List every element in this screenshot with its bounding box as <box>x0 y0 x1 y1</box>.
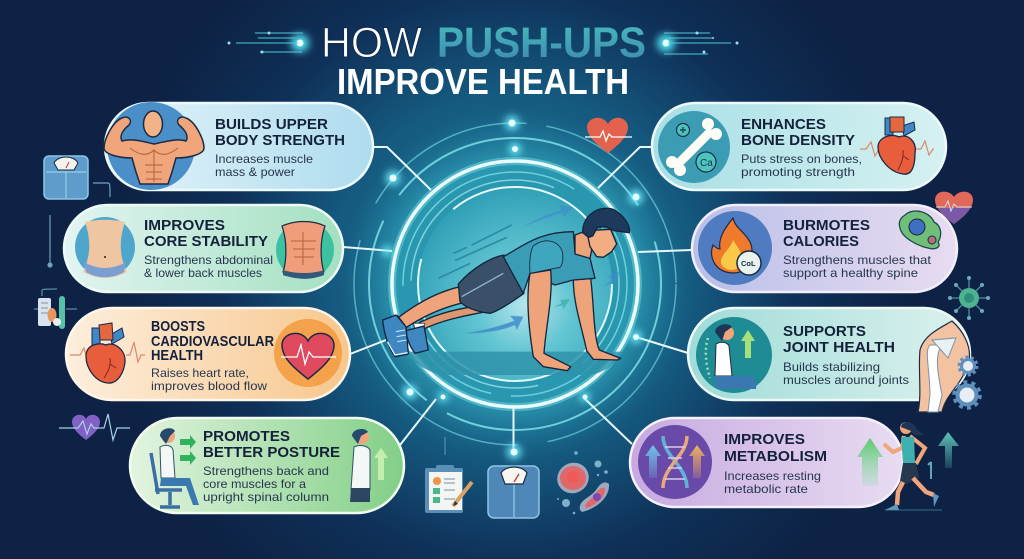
title: HOW <box>321 19 422 67</box>
text: burmotes calories: support a healthy spine <box>783 266 918 280</box>
far leg <box>415 307 486 329</box>
text: builds upper body strength: BUILDS UPPER <box>215 116 328 133</box>
text: burmotes calories: Strengthens muscles that <box>783 253 932 267</box>
floor band <box>405 352 623 375</box>
title streak right <box>657 32 738 54</box>
icon: heart with pulse in orange circle <box>274 319 342 387</box>
text: builds upper body strength <box>215 116 345 179</box>
icon: flexing muscular torso <box>104 102 204 190</box>
text: builds upper body strength: Increases muscle <box>215 152 313 166</box>
torso <box>503 232 595 293</box>
text: improves core stability <box>144 217 273 280</box>
icon: shoulder joint with gears <box>918 321 980 412</box>
title <box>321 19 646 102</box>
text: promotes better posture: BETTER POSTURE <box>203 444 340 461</box>
left decoration lines <box>48 183 110 267</box>
sleeve <box>530 241 563 273</box>
text: boosts cardiovascular health: HEALTH <box>151 347 203 364</box>
text: improves core stability: & lower back muscles <box>144 266 262 280</box>
icon: anatomical heart <box>70 323 145 383</box>
text: boosts cardiovascular health: BOOSTS <box>151 318 205 335</box>
panel: promotes better posture <box>130 418 404 513</box>
text: improves metabolism: Increases resting <box>724 469 821 483</box>
far arm <box>573 278 621 360</box>
panel: boosts cardiovascular health <box>66 308 350 400</box>
text: promotes better posture: upright spinal column <box>203 490 329 504</box>
icon: abdominal muscles <box>276 221 334 279</box>
text: promotes better posture: PROMOTES <box>203 428 290 445</box>
panel: burmotes calories <box>692 205 957 292</box>
icon: teal up arrows <box>928 432 959 479</box>
panel: builds upper body strength <box>104 102 373 190</box>
near shoe <box>383 315 408 357</box>
glowing nodes <box>382 116 643 459</box>
icon: weighing scale, bottom <box>488 466 539 518</box>
text: burmotes calories <box>783 217 932 280</box>
text: boosts cardiovascular health: improves blood flow <box>151 379 267 393</box>
text: supports joint health: muscles around joints <box>783 373 909 387</box>
near leg <box>397 287 463 328</box>
text: supports joint health: Builds stabilizing <box>783 360 880 374</box>
icon: heart with pulse, top <box>585 118 632 153</box>
neck <box>575 230 592 258</box>
icon: cells, bottom <box>552 451 609 514</box>
icon: flame with badge: CoL <box>741 259 756 268</box>
text: improves metabolism: metabolic rate <box>724 482 808 496</box>
title: IMPROVE HEALTH <box>337 61 629 102</box>
icon: green up arrow <box>857 438 883 486</box>
title: PUSH-UPS <box>437 19 646 67</box>
text: supports joint health: SUPPORTS <box>783 323 866 340</box>
shorts <box>458 255 524 313</box>
icon: DNA with arrows <box>638 425 712 499</box>
text: supports joint health: JOINT HEALTH <box>783 339 895 356</box>
icon: running woman <box>884 422 942 510</box>
icon: anatomical heart <box>860 117 934 174</box>
panel: improves core stability <box>64 205 343 292</box>
text: promotes better posture <box>203 428 340 504</box>
icon: flame with badge <box>698 211 772 285</box>
icon: clipboard, bottom <box>425 437 472 513</box>
text: improves core stability: Strengthens abdominal <box>144 253 273 267</box>
text: promotes better posture: core muscles for a <box>203 477 306 491</box>
icon: clipboard and vial, left <box>34 289 77 329</box>
text: promotes better posture: Strengthens back and <box>203 464 329 478</box>
icon: standing man with arrow <box>350 429 388 502</box>
panel: improves metabolism <box>630 418 903 507</box>
push-up figure <box>383 205 629 375</box>
text: boosts cardiovascular health: Raises heart rate, <box>151 366 249 380</box>
text: burmotes calories: BURMOTES <box>783 217 870 234</box>
text: improves core stability: CORE STABILITY <box>144 233 268 250</box>
icon: bone with calcium: Ca <box>700 158 713 169</box>
icon: purple heart with pulse <box>59 414 130 440</box>
panel: enhances bone density <box>652 103 946 190</box>
hair <box>583 208 629 237</box>
title streak left <box>228 32 309 54</box>
central ring graphic <box>340 109 690 459</box>
panel: supports joint health <box>688 308 980 412</box>
icon: waist <box>75 217 135 278</box>
text: enhances bone density: BONE DENSITY <box>741 132 855 149</box>
text: enhances bone density: promoting strength <box>741 165 855 179</box>
text: enhances bone density: ENHANCES <box>741 116 826 133</box>
text: enhances bone density <box>741 116 862 179</box>
far shoe <box>406 326 428 353</box>
icon: bone with calcium <box>658 111 730 183</box>
text: boosts cardiovascular health: CARDIOVASCULAR <box>151 333 274 350</box>
text: builds upper body strength: BODY STRENGTH <box>215 132 345 149</box>
icon: green cell <box>899 211 941 249</box>
text: builds upper body strength: mass & power <box>215 165 295 179</box>
text: improves metabolism: METABOLISM <box>724 448 827 465</box>
motion streaks <box>438 225 512 278</box>
text: supports joint health <box>783 323 909 387</box>
icon: virus <box>948 276 990 320</box>
text: improves core stability: IMPROVES <box>144 217 225 234</box>
icon: floating heart, right <box>935 192 973 224</box>
text: burmotes calories: CALORIES <box>783 233 859 250</box>
icon: seated man with arrows <box>151 428 199 507</box>
text: enhances bone density: Puts stress on bones, <box>741 152 862 166</box>
icon: weighing scale, left <box>44 156 88 199</box>
text: improves metabolism: IMPROVES <box>724 431 805 448</box>
text: boosts cardiovascular health <box>151 318 274 393</box>
text: improves metabolism <box>724 431 827 496</box>
near arm <box>528 270 571 371</box>
connector lines <box>343 147 692 452</box>
face <box>587 229 617 257</box>
icon: seated man with spine <box>696 317 772 393</box>
motion arrows <box>465 205 619 333</box>
socks <box>393 315 405 330</box>
